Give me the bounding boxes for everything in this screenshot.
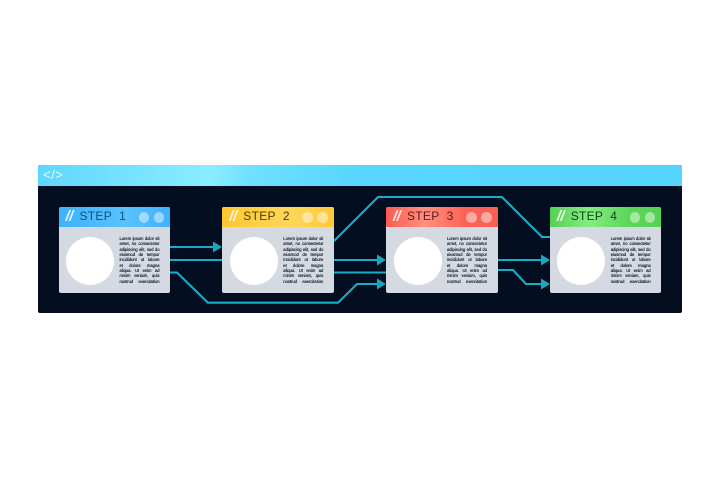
step 1 text: et dolore magna xyxy=(120,263,160,268)
step 2 text: aliqua. Ut enim ad xyxy=(283,268,323,273)
image placeholder xyxy=(394,236,442,284)
step 4 text: Lorem ipsum dolor sit xyxy=(611,236,651,241)
step 1 text: Lorem ipsum dolor sit xyxy=(120,236,160,241)
image placeholder xyxy=(230,236,278,284)
step 2 header xyxy=(222,207,334,227)
step 3 text: Lorem ipsum dolor sit xyxy=(447,236,487,241)
step 3 text: adipiscing elit, sed do xyxy=(447,247,487,252)
image placeholder xyxy=(66,236,114,284)
step 2 text: adipiscing elit, sed do xyxy=(283,247,323,252)
panel: step 4 xyxy=(550,207,661,292)
image placeholder xyxy=(557,236,605,284)
icon: slashes: // xyxy=(229,208,237,225)
step 4 text: adipiscing elit, sed do xyxy=(611,247,651,252)
step 4 text: eiusmod de tempor xyxy=(611,252,651,257)
step 1 text: incididunt ut labore xyxy=(120,257,160,262)
step 2 text: incididunt ut labore xyxy=(283,257,323,262)
step 3 text: amet, no consectetur xyxy=(447,241,487,246)
step 4 header xyxy=(550,207,662,227)
panel: step 2 xyxy=(222,207,334,292)
step 2 text xyxy=(283,236,324,284)
step 1 text: adipiscing elit, sed do xyxy=(120,247,160,252)
step 3 text: aliqua. Ut enim ad xyxy=(447,268,487,273)
step 4 text: aliqua. Ut enim ad xyxy=(611,268,651,273)
step 3 header xyxy=(386,207,498,227)
step 4 text xyxy=(610,236,651,284)
step 2 text: Lorem ipsum dolor sit xyxy=(283,236,323,241)
icon: dot xyxy=(302,212,313,222)
icon: dot xyxy=(138,212,149,222)
panel: code window xyxy=(38,165,682,313)
step 2 heading: STEP 2 xyxy=(243,209,290,223)
step 4 text: incididunt ut labore xyxy=(611,257,651,262)
step 2 text: amet, no consectetur xyxy=(283,241,323,246)
icon: slashes: // xyxy=(66,208,73,225)
step 2 text: nostrud exercitation xyxy=(283,279,323,284)
icon: slashes: // xyxy=(557,208,564,225)
icon: dot xyxy=(466,212,476,222)
icon: dot xyxy=(481,212,492,222)
step 1 text xyxy=(120,236,160,284)
icon: dot xyxy=(154,212,164,222)
step 4 text: nostrud exercitation xyxy=(611,279,651,284)
step 2 text: eiusmod de tempor xyxy=(283,252,323,257)
step 2 text: minim veniam, quis xyxy=(283,273,323,278)
window title bar xyxy=(38,165,682,186)
step 3 text: nostrud exercitation xyxy=(447,279,487,284)
step 1 text: nostrud exercitation xyxy=(120,279,160,284)
step 1 text: eiusmod de tempor xyxy=(120,252,160,257)
step 3 text: minim veniam, quis xyxy=(447,273,487,278)
step 3 heading: STEP 3 xyxy=(407,209,454,223)
panel: step 3 xyxy=(386,207,498,292)
step 4 heading: STEP 4 xyxy=(571,209,617,223)
icon: code brackets: </> xyxy=(43,167,64,182)
icon: dot xyxy=(645,212,655,222)
step 3 text: et dolore magna xyxy=(447,263,487,268)
step 4 text: amet, no consectetur xyxy=(611,241,651,246)
step 1 heading: STEP 1 xyxy=(80,209,126,223)
step 3 text xyxy=(447,236,488,284)
icon: slashes: // xyxy=(393,208,400,225)
step 4 text: et dolore magna xyxy=(611,263,651,268)
icon: dot xyxy=(630,212,640,222)
icon: dot xyxy=(317,212,328,222)
step 3 text: eiusmod de tempor xyxy=(447,252,487,257)
step 1 header xyxy=(58,207,170,227)
panel: step 1 xyxy=(58,207,170,292)
step 1 text: aliqua. Ut enim ad xyxy=(120,268,160,273)
step 4 text: minim veniam, quis xyxy=(611,273,651,278)
step 1 text: minim veniam, quis xyxy=(120,273,160,278)
step 1 text: amet, no consectetur xyxy=(120,241,160,246)
step 2 text: et dolore magna xyxy=(283,263,323,268)
step 3 text: incididunt ut labore xyxy=(447,257,487,262)
